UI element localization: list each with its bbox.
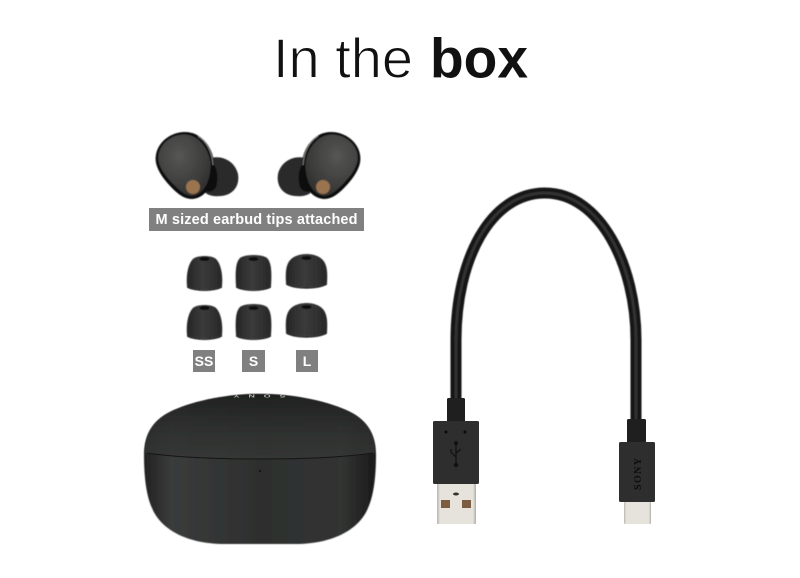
case logo: SONY [233,393,286,399]
icon: USB trident [451,442,461,467]
size label SS: SS [195,353,213,369]
case seam [147,453,373,459]
right earbud [278,132,360,199]
USB cable [433,193,655,524]
USB-C housing [619,442,655,502]
title: In the [273,26,413,90]
label: M sized earbud tips attached: M sized earbud tips attached [156,212,358,228]
USB-A vent dots [444,430,466,434]
charging case [144,393,376,544]
USB-A housing [433,421,479,484]
USB-C logo: SONY [633,457,644,490]
tip S top [236,255,271,291]
title [273,26,528,90]
size label L [296,350,318,372]
case body [144,394,376,544]
left earbud [156,132,238,199]
size label L: L [303,353,312,369]
earbud tips grid [187,254,327,340]
title: box [430,26,528,90]
case lid shading [145,394,375,459]
case indicator dot [259,470,261,472]
USB-A metal plug [437,484,476,524]
USB-C metal plug [624,502,651,524]
tip S bottom [236,304,271,340]
tip SS top [187,256,222,291]
tip L top [286,254,327,289]
USB-A collar [447,398,465,422]
size label SS [193,350,215,372]
tip L bottom [286,303,327,338]
label: M sized earbud tips attached [149,208,364,231]
USB-C collar [627,419,646,443]
tip SS bottom [187,305,222,340]
size label S: S [249,353,258,369]
cable cord [456,193,636,420]
size label S [242,350,265,372]
